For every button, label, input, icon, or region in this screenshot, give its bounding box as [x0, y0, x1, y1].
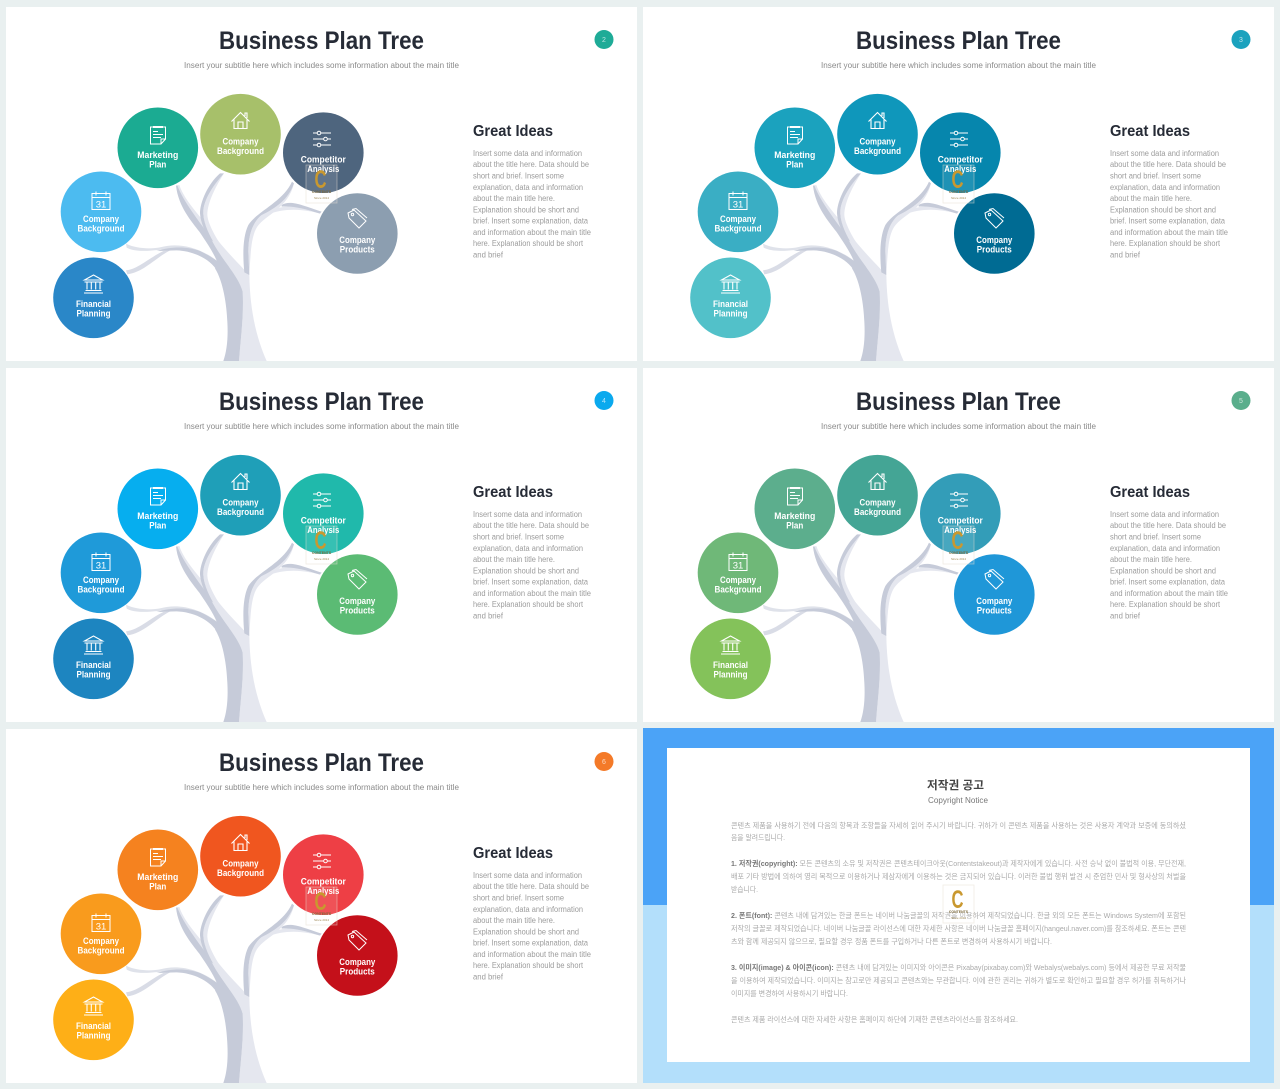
closing note: 콘텐츠 제품 라이선스에 대한 자세한 사항은 홈페이지 하단에 기재한 콘텐츠라이선스를 참조하세요.	[731, 1015, 1018, 1024]
body text: and brief	[1110, 612, 1141, 620]
copyright subheading: Copyright Notice	[928, 795, 988, 805]
subtitle: Insert your subtitle here which includes some information about the main title	[184, 421, 459, 431]
circle: company background top: Background	[217, 507, 264, 517]
circle: company background top: Company	[222, 498, 259, 508]
circle: competitor analysis: Competitor	[938, 154, 983, 164]
circle: company products: Company	[976, 235, 1012, 245]
subtitle: Insert your subtitle here which includes some information about the main title	[184, 782, 459, 792]
body text: Insert some data and information	[473, 149, 582, 158]
body text: Explanation should be short and	[473, 928, 579, 936]
circle: competitor analysis: Analysis	[307, 164, 339, 174]
body text: explanation, data and information	[473, 544, 583, 553]
body text: brief. Insert some explanation, data	[473, 216, 589, 226]
circle: company background left	[61, 532, 141, 613]
circle: company background left: Background	[714, 584, 762, 594]
circle: marketing plan: Marketing	[774, 150, 815, 160]
circle: competitor analysis: Analysis	[944, 525, 976, 535]
circle: competitor analysis: Competitor	[301, 154, 346, 164]
page badge	[594, 30, 614, 49]
circle: marketing plan	[118, 468, 198, 549]
title: Business Plan Tree	[856, 388, 1061, 416]
circle: financial planning: Planning	[76, 1030, 110, 1040]
circle: financial planning: Planning	[76, 670, 110, 680]
circle: company background top	[200, 455, 281, 536]
circle: financial planning	[690, 258, 771, 338]
circle: company products	[954, 554, 1035, 635]
panel: copyright notice	[643, 728, 1274, 1083]
body text: about the main title here.	[473, 916, 555, 925]
page badge: 5	[1239, 398, 1243, 405]
circle: company background left	[61, 894, 141, 974]
body text: brief. Insert some explanation, data	[473, 938, 589, 948]
body text: here. Explanation should be short	[473, 600, 584, 609]
circle: financial planning: Financial	[713, 660, 748, 670]
heading: great ideas: Great Ideas	[473, 484, 553, 501]
body text: about the title here. Data should be	[473, 521, 590, 530]
page badge: 4	[602, 398, 606, 405]
circle: company background top: Background	[217, 868, 264, 878]
tree illustration	[126, 895, 322, 1083]
clause 3: 이미지를 변경하여 사용하시기 바랍니다.	[731, 989, 848, 998]
circle: marketing plan: Marketing	[137, 150, 178, 160]
body text: about the title here. Data should be	[473, 882, 590, 891]
circle: company background top	[837, 455, 918, 536]
body text: explanation, data and information	[473, 183, 583, 192]
clause 2	[731, 911, 1186, 946]
body text	[473, 871, 592, 982]
circle: company background top: Company	[860, 498, 896, 508]
clause 1: 1. 저작권(copyright): 모든 콘텐츠의 소유 및 저작권은 콘텐츠테이크아웃(Contentstakeout)과 제작자에게 있습니다. 사전 승낙 없이 불법적 이용, 무단전재,	[731, 859, 1186, 868]
heading: great ideas: Great Ideas	[1110, 123, 1190, 140]
circle: marketing plan: Plan	[149, 160, 166, 170]
circle: company products: Company	[339, 235, 375, 245]
heading: great ideas: Great Ideas	[473, 845, 553, 862]
body text	[1110, 510, 1229, 620]
watermark	[306, 165, 337, 203]
page badge	[1232, 30, 1250, 49]
circle: marketing plan: Plan	[149, 882, 166, 892]
body text: Insert some data and information	[1110, 510, 1219, 519]
circle: marketing plan: Marketing	[137, 872, 178, 882]
clause 1: 받습니다.	[731, 885, 758, 894]
circle: company background left: Background	[714, 224, 762, 234]
circle: company products: Company	[339, 596, 375, 606]
circle: competitor analysis	[920, 473, 1001, 554]
panel: slide 6 tree	[6, 729, 637, 1083]
circle: financial planning	[53, 980, 134, 1060]
page badge	[594, 752, 614, 771]
body text: about the main title here.	[473, 555, 555, 564]
body text: brief. Insert some explanation, data	[473, 578, 589, 586]
page badge: 6	[602, 759, 606, 766]
body text: here. Explanation should be short	[473, 239, 584, 248]
watermark	[943, 165, 974, 203]
circle: financial planning: Financial	[713, 299, 748, 309]
circle: company products: Products	[340, 606, 375, 616]
circle: company products	[954, 193, 1035, 274]
circle: company background top	[200, 94, 281, 174]
circle: company background top	[200, 816, 281, 896]
circle: marketing plan: Plan	[786, 520, 803, 530]
watermark	[943, 526, 974, 564]
circle: financial planning: Financial	[76, 299, 111, 309]
body text: here. Explanation should be short	[473, 961, 584, 970]
circle: competitor analysis	[283, 112, 364, 193]
body text: Explanation should be short and	[473, 206, 579, 214]
circle: competitor analysis	[283, 473, 364, 554]
circle: company background left: Background	[78, 224, 124, 234]
body text: about the title here. Data should be	[473, 160, 590, 169]
circle: competitor analysis: Analysis	[307, 886, 339, 896]
circle: competitor analysis: Analysis	[944, 164, 976, 174]
circle: company background top: Background	[854, 146, 901, 156]
panel: slide 2 tree	[6, 7, 637, 361]
copyright intro: 콘텐츠 제품을 사용하기 전에 다음의 항목과 조항들을 자세히 읽어 주시기 바랍니다. 귀하가 이 콘텐츠 제품을 사용하는 것은 사용자 계약과 보증에 동의하셨	[731, 821, 1186, 830]
circle: company products: Company	[339, 957, 375, 967]
body text: about the title here. Data should be	[1110, 521, 1227, 530]
circle: company background left: Background	[78, 584, 124, 594]
subtitle: Insert your subtitle here which includes some information about the main title	[821, 421, 1096, 431]
circle: company products	[317, 554, 398, 635]
circle: company background top: Company	[222, 136, 259, 146]
body text: short and brief. Insert some	[473, 172, 565, 180]
body text: and information about the main title	[1110, 589, 1229, 598]
body text: about the main title here.	[1110, 555, 1192, 564]
circle: competitor analysis: Competitor	[301, 876, 346, 886]
circle: marketing plan: Marketing	[774, 511, 815, 521]
body text: here. Explanation should be short	[1110, 239, 1221, 248]
circle: financial planning: Financial	[76, 1021, 111, 1031]
circle: marketing plan: Plan	[149, 520, 166, 530]
heading: great ideas: Great Ideas	[473, 123, 553, 140]
clause 1	[731, 859, 1186, 894]
circle: competitor analysis	[920, 112, 1001, 193]
watermark	[306, 526, 337, 564]
body text: and brief	[473, 612, 504, 620]
body text: Insert some data and information	[473, 510, 582, 519]
panel: slide 5 tree	[643, 368, 1274, 722]
body text	[473, 149, 592, 260]
tree illustration	[126, 534, 322, 722]
body text: Insert some data and information	[473, 871, 582, 880]
circle: company background top: Company	[222, 858, 259, 868]
body text: and information about the main title	[473, 950, 592, 959]
circle: financial planning	[690, 618, 771, 699]
panel: slide 4 tree	[6, 368, 637, 722]
copyright heading: 저작권 공고	[927, 778, 984, 792]
page badge	[594, 391, 614, 410]
circle: marketing plan	[118, 830, 198, 910]
body text: and information about the main title	[1110, 228, 1229, 237]
subtitle: Insert your subtitle here which includes some information about the main title	[821, 60, 1096, 70]
clause 3: 을 이용하여 제작되었습니다. 이미지는 참고로만 제공되고 콘텐츠와는 무관합니다. 이에 관한 권리는 귀하가 별도로 확인하고 필요할 경우 허가를 취득하거나	[731, 976, 1186, 985]
circle: company background left	[698, 532, 778, 613]
clause 1: 배포 기타 방법에 의하여 영리 목적으로 이용하거나 제삼자에게 이용하는 것은 금지되어 있습니다. 이러한 불법 행위 발견 시 준엄한 민사 및 형사상의 처벌을	[731, 872, 1186, 881]
body text: explanation, data and information	[1110, 183, 1220, 192]
page badge: 3	[1239, 37, 1243, 44]
body text: short and brief. Insert some	[1110, 172, 1202, 180]
body text: Insert some data and information	[1110, 149, 1219, 158]
tree illustration	[763, 534, 959, 722]
body text: here. Explanation should be short	[1110, 600, 1221, 609]
circle: marketing plan	[754, 468, 835, 549]
circle: company background left: Company	[720, 575, 756, 585]
body text: and information about the main title	[473, 589, 592, 598]
clause 2: 2. 폰트(font): 콘텐츠 내에 담겨있는 한글 폰트는 네이버 나눔글꼴의 저작권을 이용하여 제작되었습니다. 한글 외의 모든 폰트는 Windows System에 포함된	[731, 911, 1186, 920]
circle: marketing plan: Marketing	[137, 511, 178, 521]
circle: company background left: Company	[720, 214, 756, 224]
tree illustration	[763, 173, 959, 361]
body text	[1110, 149, 1229, 260]
circle: company background top: Background	[217, 146, 264, 156]
circle: competitor analysis: Analysis	[307, 525, 339, 535]
body text: short and brief. Insert some	[1110, 532, 1202, 542]
page badge	[1232, 391, 1250, 410]
copyright intro	[731, 821, 1186, 842]
body text: brief. Insert some explanation, data	[1110, 216, 1226, 226]
circle: company background left: Company	[83, 936, 119, 946]
title: Business Plan Tree	[856, 27, 1061, 55]
body text: about the main title here.	[1110, 194, 1192, 203]
body text: Explanation should be short and	[473, 566, 579, 576]
body text: short and brief. Insert some	[473, 532, 565, 542]
title: Business Plan Tree	[219, 749, 424, 777]
circle: financial planning: Planning	[714, 308, 748, 318]
clause 3: 3. 이미지(image) & 아이콘(icon): 콘텐츠 내에 담겨있는 이미지와 아이콘은 Pixabay(pixabay.com)와 Webalys(webalys.com) 등에서 제공한 무료 저작물	[731, 963, 1186, 972]
circle: financial planning: Financial	[76, 660, 111, 670]
circle: financial planning: Planning	[76, 308, 110, 318]
circle: financial planning	[53, 258, 134, 338]
title: Business Plan Tree	[219, 27, 424, 55]
tree illustration	[126, 173, 322, 361]
circle: marketing plan	[754, 108, 835, 188]
body text: short and brief. Insert some	[473, 894, 565, 902]
body text: and brief	[473, 250, 504, 260]
panel: slide 3 tree	[643, 7, 1274, 361]
copyright intro: 음을 알려드립니다.	[731, 833, 785, 842]
body text: and information about the main title	[473, 228, 592, 237]
circle: company products: Products	[340, 244, 375, 254]
circle: company background left: Background	[78, 946, 124, 956]
page badge: 2	[602, 37, 606, 44]
circle: company products: Products	[977, 606, 1012, 616]
body text: Explanation should be short and	[1110, 566, 1216, 576]
heading: great ideas: Great Ideas	[1110, 484, 1190, 501]
circle: company background left	[698, 172, 778, 252]
circle: competitor analysis: Competitor	[938, 516, 983, 526]
body text: and brief	[1110, 250, 1141, 260]
circle: company background top: Company	[860, 136, 896, 146]
subtitle: Insert your subtitle here which includes some information about the main title	[184, 60, 459, 70]
title: Business Plan Tree	[219, 388, 424, 416]
clause 2: 저작의 글꼴로 제작되었습니다. 네이버 나눔글꼴 라이선스에 대한 자세한 사항은 네이버 나눔글꼴 홈페이지(hangeul.naver.com)를 참조하세요. 폰트는 콘텐	[731, 924, 1186, 933]
circle: company background left	[61, 172, 141, 252]
body text: about the main title here.	[473, 194, 555, 203]
circle: financial planning	[53, 618, 134, 699]
circle: company background left: Company	[83, 575, 119, 585]
body text: brief. Insert some explanation, data	[1110, 578, 1226, 586]
watermark	[943, 885, 974, 923]
circle: financial planning: Planning	[714, 670, 748, 680]
circle: company products: Company	[976, 596, 1012, 606]
body text	[473, 510, 592, 620]
circle: competitor analysis: Competitor	[301, 516, 346, 526]
circle: company background top: Background	[854, 507, 901, 517]
body text: and brief	[473, 972, 504, 982]
watermark	[306, 887, 337, 925]
circle: company products	[317, 915, 398, 996]
body text: about the title here. Data should be	[1110, 160, 1227, 169]
circle: competitor analysis	[283, 834, 364, 915]
circle: company background top	[837, 94, 918, 174]
clause 3	[731, 963, 1186, 998]
circle: company products	[317, 193, 398, 274]
clause 2: 츠와 함께 제공되지 않으므로, 필요할 경우 정품 폰트를 구입하거나 다른 폰트로 변경하여 사용하시기 바랍니다.	[731, 937, 1052, 946]
body text: explanation, data and information	[473, 905, 583, 914]
body text: explanation, data and information	[1110, 544, 1220, 553]
circle: company products: Products	[340, 966, 375, 976]
circle: company background left: Company	[83, 214, 119, 224]
circle: marketing plan	[118, 108, 198, 188]
circle: company products: Products	[977, 244, 1012, 254]
circle: marketing plan: Plan	[786, 160, 803, 170]
body text: Explanation should be short and	[1110, 206, 1216, 214]
